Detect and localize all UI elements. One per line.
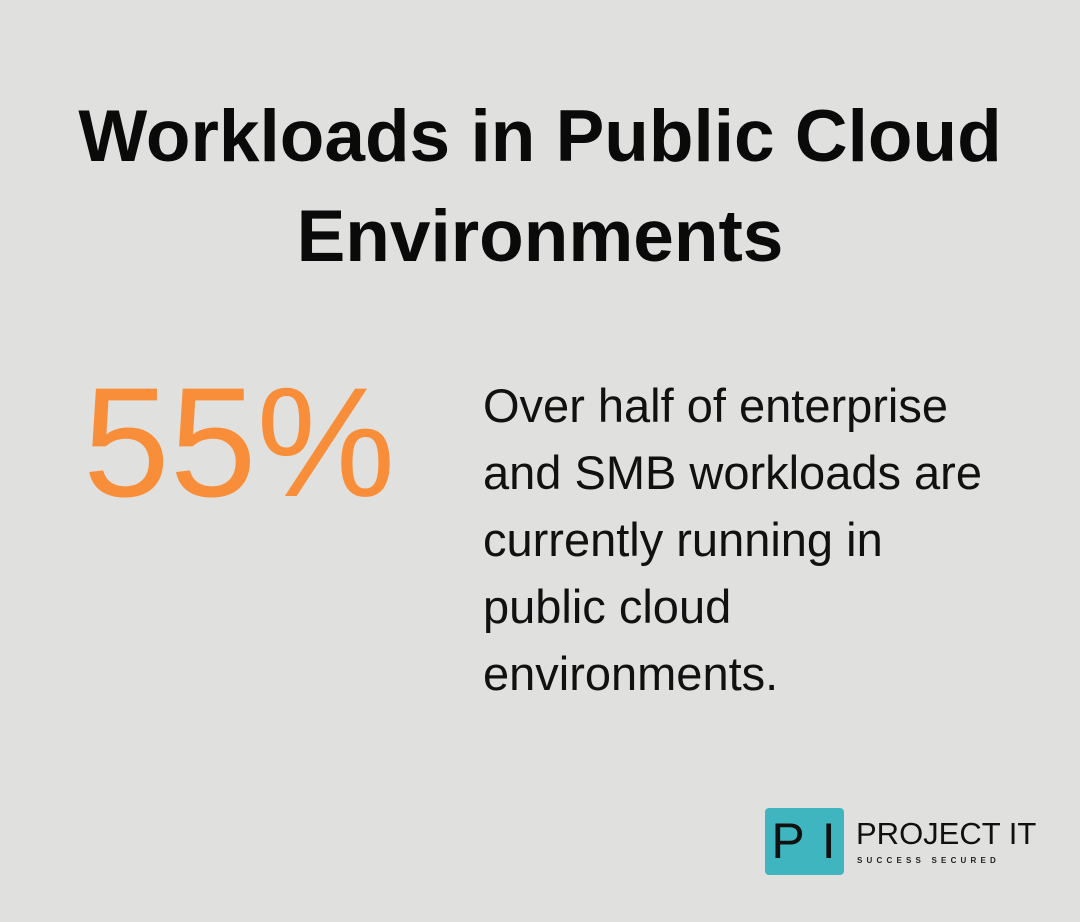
description text bbox=[483, 379, 982, 700]
logo: Project IT bbox=[765, 808, 1036, 875]
title bbox=[78, 96, 1002, 277]
description text: Over half of enterprise bbox=[483, 379, 948, 432]
description text: currently running in bbox=[483, 513, 883, 566]
big stat: 55%: 55% bbox=[83, 356, 395, 530]
description text: environments. bbox=[483, 647, 778, 700]
icon: PI badge: P I bbox=[771, 813, 838, 869]
description text: public cloud bbox=[483, 580, 731, 633]
title: Environments bbox=[297, 196, 783, 277]
description text: and SMB workloads are bbox=[483, 446, 982, 499]
logo name: PROJECT IT bbox=[856, 816, 1036, 851]
title: Workloads in Public Cloud bbox=[78, 96, 1002, 177]
logo tagline: SUCCESS SECURED bbox=[857, 856, 1000, 865]
